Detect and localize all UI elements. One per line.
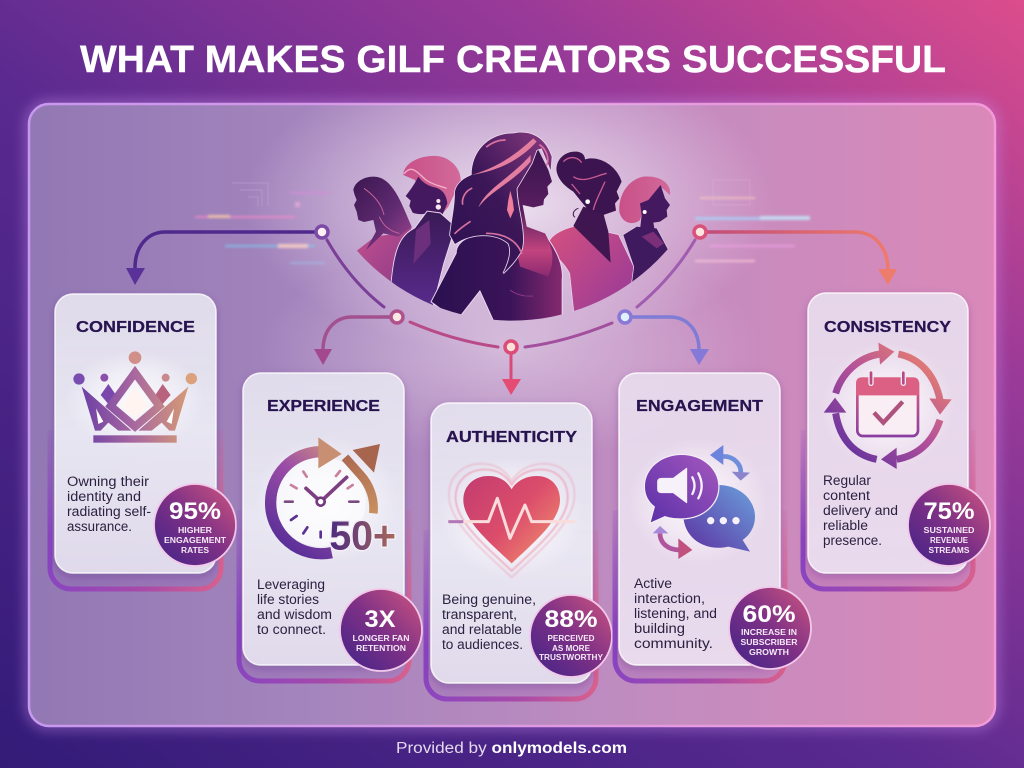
connector arrow: to experience — [314, 317, 397, 365]
description — [442, 592, 536, 652]
stat badge: 75% — [908, 484, 990, 566]
card: experience — [239, 373, 422, 681]
connector arrow: to consistency — [700, 232, 897, 285]
description — [823, 473, 898, 548]
icon: clock with 50+ — [255, 437, 398, 563]
stat badge: 88%: TRUSTWORTHY — [539, 652, 603, 662]
stat badge: 60%: 60% — [742, 601, 796, 628]
icon: calendar with cycle arrows — [821, 343, 954, 469]
card body — [808, 293, 968, 573]
connector arrow: to engagement — [625, 317, 709, 365]
description: delivery and — [823, 503, 898, 518]
heading: CONSISTENCY — [824, 319, 951, 336]
description: radiating self- — [67, 504, 151, 519]
connector nodes — [316, 226, 706, 353]
stat badge: 75%: SUSTAINED — [924, 525, 974, 535]
description: Owning their — [67, 474, 150, 489]
description: Regular — [823, 473, 872, 488]
description: to connect. — [257, 622, 326, 637]
description: and wisdom — [257, 607, 332, 622]
stat badge: 60% — [729, 587, 811, 669]
stat badge: 3X: RETENTION — [356, 643, 406, 653]
stat badge: 3X: 3X — [364, 606, 396, 633]
woman second from right — [549, 152, 633, 320]
stat badge: 60%: GROWTH — [749, 647, 789, 657]
card: consistency — [803, 293, 990, 589]
woman far right — [619, 176, 670, 282]
description: interaction, — [634, 591, 705, 606]
description: to audiences. — [442, 637, 523, 652]
woman second from left — [390, 156, 461, 317]
description: identity and — [67, 489, 141, 504]
card frame — [803, 430, 973, 589]
silhouettes of five women — [353, 133, 670, 327]
stat badge: 88% — [530, 595, 612, 677]
woman centre — [432, 133, 562, 327]
card frame — [426, 530, 596, 699]
stat badge: 88%: 88% — [544, 606, 598, 633]
stat badge: 95%: RATES — [181, 545, 209, 555]
card: authenticity — [426, 403, 612, 699]
footer credit: Provided by onlymodels.com — [396, 740, 627, 757]
icon: speech bubbles — [628, 438, 768, 565]
description: reliable — [823, 518, 868, 533]
card body — [431, 403, 592, 683]
stat badge: 60%: INCREASE IN — [741, 627, 797, 637]
icon: heart with pulse — [440, 455, 583, 578]
heading: CONFIDENCE — [76, 319, 195, 336]
description: transparent, — [442, 607, 517, 622]
heading: AUTHENTICITY — [446, 429, 577, 446]
stat badge: 95%: ENGAGEMENT — [164, 535, 227, 545]
card body — [55, 294, 216, 573]
card: confidence — [50, 294, 236, 589]
description: building — [634, 621, 685, 636]
description: presence. — [823, 533, 882, 548]
description — [634, 576, 717, 651]
card body — [619, 373, 780, 665]
stat badge: 3X — [340, 589, 422, 671]
description: and relatable — [442, 622, 522, 637]
decorative light streaks — [195, 180, 810, 264]
description — [67, 474, 151, 534]
stat badge: 3X: LONGER FAN — [352, 633, 410, 643]
card frame — [239, 510, 409, 681]
card body — [243, 373, 404, 665]
card: engagement — [615, 373, 811, 681]
stat badge: 88%: AS MORE — [552, 643, 590, 653]
icon: crown — [65, 350, 205, 450]
stat badge: 75%: REVENUE — [930, 535, 968, 545]
description: Leveraging — [257, 577, 325, 592]
stat badge: 95%: 95% — [169, 498, 221, 525]
description: assurance. — [67, 519, 132, 534]
connector arrow: to confidence — [126, 232, 322, 285]
description — [257, 577, 332, 637]
description: community. — [634, 636, 713, 651]
icon: clock with 50+: 50+ — [329, 512, 396, 558]
heading: ENGAGEMENT — [636, 398, 763, 415]
description: life stories — [257, 592, 319, 607]
stat badge: 75%: STREAMS — [928, 545, 970, 555]
card frame — [50, 430, 221, 589]
description: content — [823, 488, 870, 503]
description: listening, and — [634, 606, 717, 621]
connector: central arc — [327, 240, 695, 347]
card frame — [615, 510, 785, 681]
connector arrow: to authenticity — [502, 347, 521, 395]
stat badge: 60%: SUBSCRIBER — [740, 637, 798, 647]
stat badge: 88%: PERCEIVED — [548, 633, 594, 643]
stat badge: 75%: 75% — [924, 498, 974, 525]
stat badge: 95%: HIGHER — [178, 525, 213, 535]
heading: EXPERIENCE — [267, 398, 380, 415]
woman far left — [353, 177, 412, 293]
stat badge: 95% — [154, 484, 236, 566]
description: Being genuine, — [442, 592, 536, 607]
title: WHAT MAKES GILF CREATORS SUCCESSFUL — [80, 39, 946, 81]
description: Active — [634, 576, 672, 591]
